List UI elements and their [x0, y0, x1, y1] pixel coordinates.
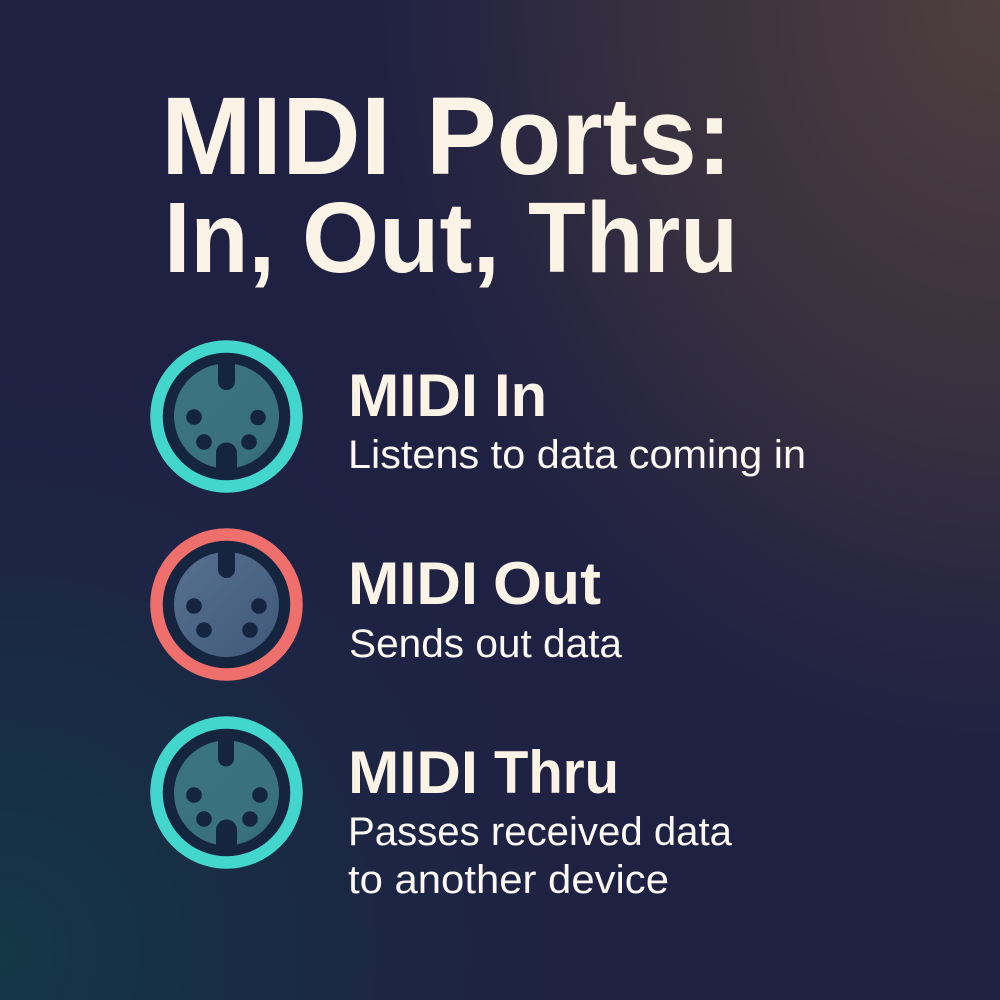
title: Out, — [302, 182, 500, 294]
title: In, — [164, 182, 275, 294]
heading: MIDI Out: MIDI — [348, 550, 478, 617]
title: MIDI — [161, 75, 391, 198]
icon: MIDI Thru port — [156, 722, 296, 862]
description: MIDI Thru — [348, 810, 733, 902]
heading: MIDI In: In — [494, 362, 547, 429]
title — [161, 75, 738, 294]
heading: MIDI Thru — [348, 739, 619, 806]
title: Ports: — [426, 75, 732, 198]
panel: MIDI In — [156, 346, 806, 486]
heading: MIDI Out: Out — [493, 550, 601, 617]
panel: MIDI Thru — [156, 722, 733, 902]
icon: MIDI In port — [156, 346, 296, 486]
description: MIDI Thru: Passes received data — [348, 810, 733, 854]
panel: MIDI Out — [156, 534, 623, 674]
icon: MIDI Out port — [156, 534, 296, 674]
heading: MIDI In: MIDI — [348, 362, 478, 429]
description: MIDI In: Listens to data coming in — [348, 433, 806, 477]
heading: MIDI Out — [348, 550, 601, 617]
heading: MIDI In — [348, 362, 547, 429]
heading: MIDI Thru: Thru — [494, 739, 619, 806]
title: Thru — [528, 182, 738, 294]
heading: MIDI Thru: MIDI — [348, 739, 478, 806]
description: MIDI Thru: to another device — [348, 858, 669, 902]
description: MIDI Out: Sends out data — [349, 622, 623, 666]
